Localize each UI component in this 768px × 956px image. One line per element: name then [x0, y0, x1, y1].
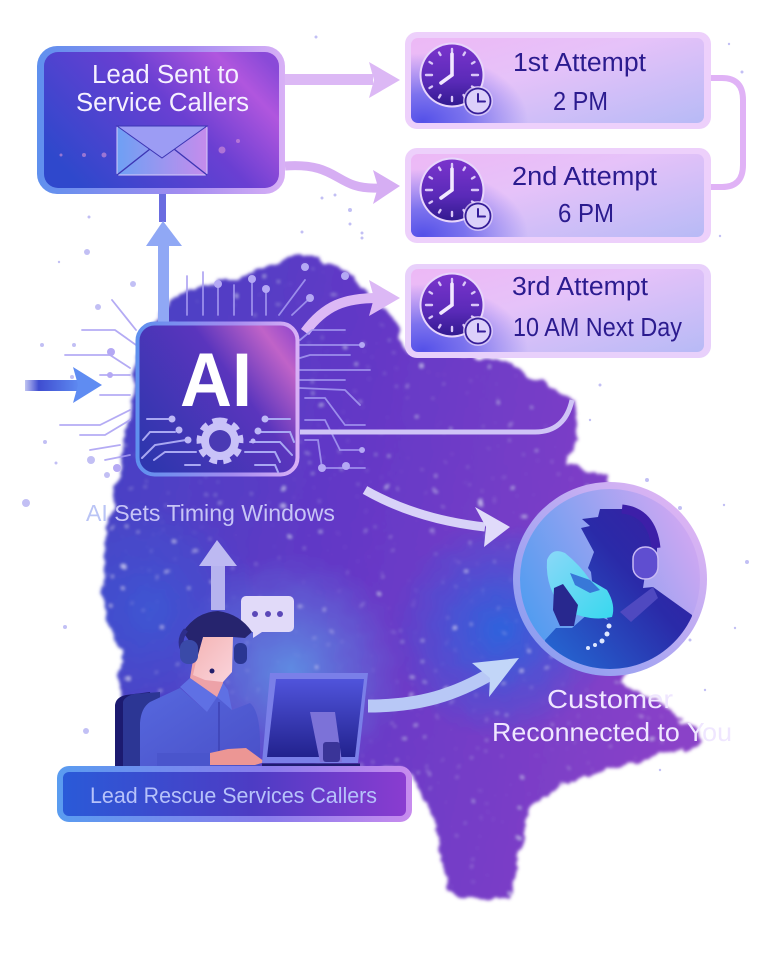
- label: AI sets timing windows: AI Sets Timing Windows: [86, 500, 335, 526]
- glowing specks: [60, 139, 240, 158]
- panel: lead sent to service callers: [37, 46, 285, 194]
- label: customer reconnected: Reconnected to You: [492, 717, 732, 747]
- arrow: caller to customer: [368, 658, 519, 706]
- arrow: input into AI chip: [25, 367, 102, 403]
- hair: [183, 611, 252, 655]
- text: attempt time: [512, 163, 657, 228]
- arrow: AI up to lead box: [146, 194, 182, 322]
- icon: envelope: [117, 126, 207, 175]
- text: attempt time: 2 PM: [553, 88, 608, 116]
- headset: [622, 509, 656, 548]
- arrow: AI to customer: [365, 490, 510, 547]
- illustration: call center agent: [115, 611, 368, 766]
- panel: third attempt: [405, 264, 711, 358]
- connector: AI to third attempt: [305, 280, 400, 332]
- circuit nodes: [107, 263, 365, 472]
- connector: AI to customer long line: [300, 400, 572, 432]
- text: attempt time: 10 AM Next Day: [513, 314, 682, 342]
- connector: first to second attempt bracket: [708, 78, 743, 187]
- text: attempt time: 1st Attempt: [513, 49, 646, 77]
- heading: lead box: Lead Sent to: [92, 61, 239, 89]
- arm and hands: [157, 753, 212, 766]
- panel: AI chip: [138, 324, 298, 474]
- connector: lead box to second attempt: [285, 166, 400, 204]
- text: attempt time: 6 PM: [558, 200, 614, 228]
- panel: lead rescue services callers: [57, 766, 412, 822]
- icon: clock: [420, 42, 493, 116]
- headset: [181, 630, 186, 648]
- connector: lead box to first attempt: [285, 62, 400, 98]
- silhouette: [545, 509, 692, 680]
- hand: [553, 584, 578, 626]
- arrow: callers up to AI: [199, 540, 237, 610]
- phone: [547, 551, 613, 618]
- icon: clock: [420, 158, 493, 231]
- icon: speech bubble: [241, 596, 294, 638]
- icon: customer on phone: [513, 482, 707, 680]
- heading: lead box: Service Callers: [76, 89, 249, 117]
- icon: clock: [420, 272, 493, 346]
- circuit traces around AI chip: [60, 272, 370, 468]
- chair: [115, 692, 165, 766]
- icon: gear: [201, 422, 239, 460]
- scattered paint specks: [22, 36, 749, 771]
- text: attempt time: 2nd Attempt: [512, 163, 657, 191]
- label: customer reconnected: [492, 684, 732, 747]
- call dots: [586, 624, 612, 650]
- torso: [140, 688, 260, 766]
- heading: AI: AI: [180, 338, 252, 423]
- panel: first attempt: [405, 32, 711, 129]
- panel: second attempt: [405, 148, 711, 243]
- text: attempt time: 3rd Attempt: [512, 273, 648, 301]
- chip traces: [142, 419, 294, 472]
- label: banner: Lead Rescue Services Callers: [90, 783, 377, 808]
- label: customer reconnected: Customer: [547, 684, 673, 714]
- neck and face: [190, 660, 225, 697]
- heading: lead box: [76, 61, 249, 117]
- text: attempt time: [513, 49, 646, 116]
- text: attempt time: [512, 273, 682, 342]
- background paint splash: [98, 252, 704, 903]
- monitor: [262, 673, 368, 763]
